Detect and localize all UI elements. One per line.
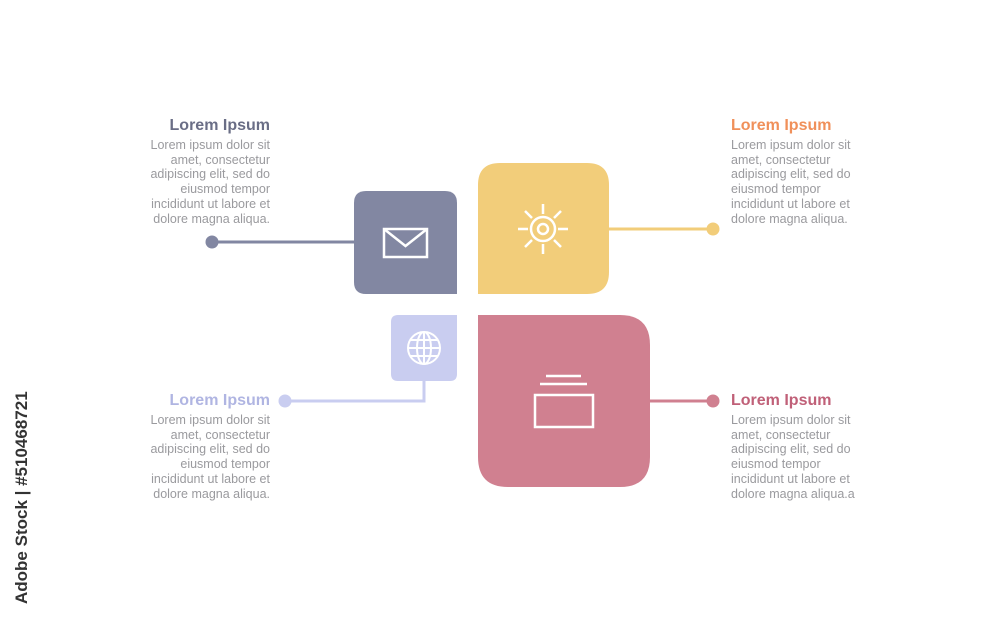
text: top left: amet, consectetur bbox=[171, 153, 270, 167]
icon: stacked tray bbox=[535, 376, 593, 427]
text: top right bbox=[731, 117, 851, 226]
text: top left: incididunt ut labore et bbox=[151, 197, 270, 211]
panel: yellow square bbox=[478, 163, 609, 294]
panel: grey square bbox=[354, 191, 457, 294]
panel: lavender square bbox=[391, 315, 457, 381]
text: top right: eiusmod tempor bbox=[731, 182, 821, 196]
connector: pink bbox=[649, 394, 720, 408]
text: bottom right: Lorem Ipsum bbox=[731, 392, 831, 409]
text: bottom right: eiusmod tempor bbox=[731, 457, 821, 471]
text: top right: Lorem ipsum dolor sit bbox=[731, 138, 850, 152]
text: bottom left bbox=[150, 392, 270, 501]
text: top right: adipiscing elit, sed do bbox=[731, 167, 851, 181]
text: top left: dolore magna aliqua. bbox=[153, 212, 270, 226]
text: top right: amet, consectetur bbox=[731, 153, 830, 167]
text: bottom left: incididunt ut labore et bbox=[151, 472, 270, 486]
icon: envelope bbox=[384, 229, 427, 257]
panel: pink square bbox=[478, 315, 650, 487]
text: bottom left: adipiscing elit, sed do bbox=[150, 442, 270, 456]
text: bottom right: Lorem ipsum dolor sit bbox=[731, 413, 850, 427]
text: top left: adipiscing elit, sed do bbox=[150, 167, 270, 181]
text: bottom left: amet, consectetur bbox=[171, 428, 270, 442]
text: top left: eiusmod tempor bbox=[180, 182, 270, 196]
connector: lavender bbox=[278, 380, 424, 408]
text: bottom left: dolore magna aliqua. bbox=[153, 487, 270, 501]
stock caption: Adobe Stock | #510468721 bbox=[12, 391, 31, 604]
icon: globe bbox=[408, 332, 440, 364]
text: bottom right: dolore magna aliqua.a bbox=[731, 487, 855, 501]
text: bottom left: eiusmod tempor bbox=[180, 457, 270, 471]
text: bottom left: Lorem ipsum dolor sit bbox=[150, 413, 270, 427]
text: top right: Lorem Ipsum bbox=[731, 117, 831, 134]
text: top right: incididunt ut labore et bbox=[731, 197, 850, 211]
connector: yellow bbox=[608, 222, 720, 236]
text: bottom left: Lorem Ipsum bbox=[170, 392, 270, 409]
connector: grey bbox=[206, 236, 355, 248]
text: top left bbox=[150, 117, 270, 226]
text: bottom right: adipiscing elit, sed do bbox=[731, 442, 851, 456]
text: top right: dolore magna aliqua. bbox=[731, 212, 848, 226]
text: top left: Lorem Ipsum bbox=[170, 117, 270, 134]
text: bottom right: amet, consectetur bbox=[731, 428, 830, 442]
icon: sun wheel bbox=[518, 204, 568, 254]
text: bottom right bbox=[731, 392, 855, 501]
text: bottom right: incididunt ut labore et bbox=[731, 472, 850, 486]
text: top left: Lorem ipsum dolor sit bbox=[150, 138, 270, 152]
